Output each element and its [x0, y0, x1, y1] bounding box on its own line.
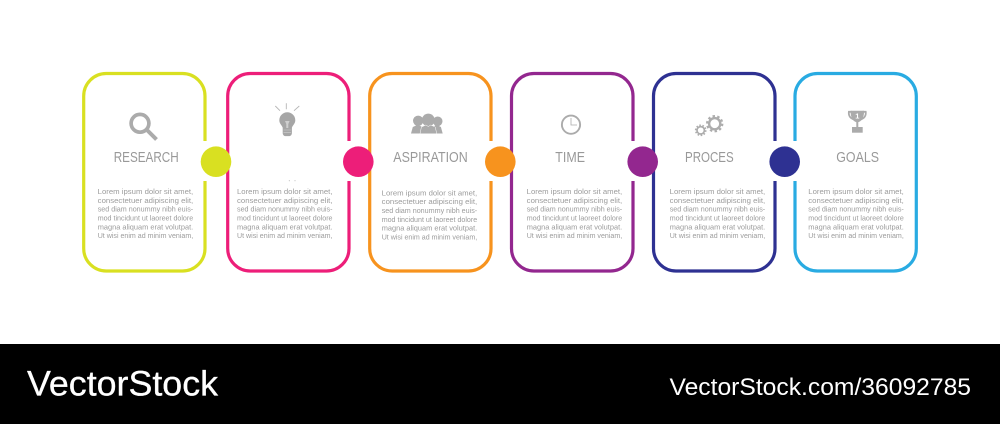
text block: aspiration: mod tincidunt ut laoreet dolore	[382, 215, 477, 224]
card outline: goals	[795, 74, 916, 271]
text block: research: Ut wisi enim ad minim veniam,	[98, 231, 193, 240]
text block: idea: consectetuer adipiscing elit,	[237, 196, 332, 205]
text block: aspiration: sed diam nonummy nibh euis-	[382, 206, 478, 215]
panel: research	[84, 74, 205, 271]
text block: aspiration: magna aliquam erat volutpat.	[382, 224, 477, 233]
footer logo wordmark: VectorStock	[27, 364, 219, 404]
footer image id: VectorStock.com/36092785	[670, 374, 971, 401]
text block: process: Lorem ipsum dolor sit amet,	[670, 187, 765, 196]
text block: research: mod tincidunt ut laoreet dolore	[98, 213, 193, 222]
icon: group of people	[411, 114, 443, 134]
text block: aspiration: Ut wisi enim ad minim veniam,	[382, 233, 477, 242]
text block: process: consectetuer adipiscing elit,	[670, 196, 765, 205]
panel: process	[654, 74, 775, 271]
card outline: aspiration	[370, 74, 491, 271]
text block: time: mod tincidunt ut laoreet dolore	[527, 213, 622, 222]
text block: idea	[237, 187, 333, 240]
remnant dots	[289, 180, 296, 181]
icon: light bulb	[275, 103, 299, 136]
heading: aspiration: ASPIRATION	[393, 149, 468, 166]
panel: time	[512, 74, 633, 271]
card outline: research	[84, 74, 205, 271]
text block: time: Lorem ipsum dolor sit amet,	[527, 187, 622, 196]
footer band	[0, 344, 1000, 424]
text block: process: mod tincidunt ut laoreet dolore	[670, 213, 765, 222]
text block: goals: mod tincidunt ut laoreet dolore	[808, 213, 904, 222]
text block: idea: Ut wisi enim ad minim veniam,	[237, 231, 332, 240]
text block: research: consectetuer adipiscing elit,	[98, 196, 193, 205]
text block: time: magna aliquam erat volutpat.	[527, 222, 622, 231]
text block: goals: sed diam nonummy nibh euis-	[808, 205, 904, 214]
text block: process: sed diam nonummy nibh euis-	[670, 205, 766, 214]
card outline: idea	[228, 74, 349, 271]
panel: idea	[228, 74, 349, 271]
card outline: process	[654, 74, 775, 271]
text block: process	[670, 187, 766, 240]
text block: goals: consectetuer adipiscing elit,	[808, 196, 904, 205]
icon: clock	[562, 116, 580, 134]
icon: gears	[696, 116, 722, 135]
text block: idea: magna aliquam erat volutpat.	[237, 222, 332, 231]
text block: goals: Lorem ipsum dolor sit amet,	[808, 187, 904, 196]
connector dots	[201, 146, 800, 177]
text block: research: Lorem ipsum dolor sit amet,	[98, 187, 193, 196]
icon: trophy	[849, 111, 866, 133]
text block: time: sed diam nonummy nibh euis-	[527, 205, 623, 214]
text block: time: consectetuer adipiscing elit,	[527, 196, 622, 205]
text block: time	[527, 187, 623, 240]
text block: goals: Ut wisi enim ad minim veniam,	[808, 231, 904, 240]
heading: process: PROCES	[685, 149, 734, 166]
panel: goals	[795, 74, 916, 271]
icon: magnifying glass	[131, 114, 156, 140]
text block: research: magna aliquam erat volutpat.	[98, 222, 193, 231]
text block: idea: Lorem ipsum dolor sit amet,	[237, 187, 332, 196]
panel: aspiration	[370, 74, 491, 271]
heading: research: RESEARCH	[114, 149, 179, 166]
text block: process: Ut wisi enim ad minim veniam,	[670, 231, 765, 240]
text block: aspiration: Lorem ipsum dolor sit amet,	[382, 188, 477, 197]
heading: time: TIME	[555, 149, 585, 166]
icon: trophy: 1	[855, 112, 859, 121]
text block: research	[98, 187, 194, 240]
text block: goals: magna aliquam erat volutpat.	[808, 222, 904, 231]
text block: time: Ut wisi enim ad minim veniam,	[527, 231, 622, 240]
text block: research: sed diam nonummy nibh euis-	[98, 205, 194, 214]
text block: aspiration	[382, 188, 478, 242]
text block: goals	[808, 187, 904, 240]
heading: goals: GOALS	[836, 149, 879, 166]
text block: process: magna aliquam erat volutpat.	[670, 222, 765, 231]
text block: aspiration: consectetuer adipiscing elit,	[382, 197, 477, 206]
text block: idea: mod tincidunt ut laoreet dolore	[237, 213, 332, 222]
card outline: time	[512, 74, 633, 271]
text block: idea: sed diam nonummy nibh euis-	[237, 205, 333, 214]
